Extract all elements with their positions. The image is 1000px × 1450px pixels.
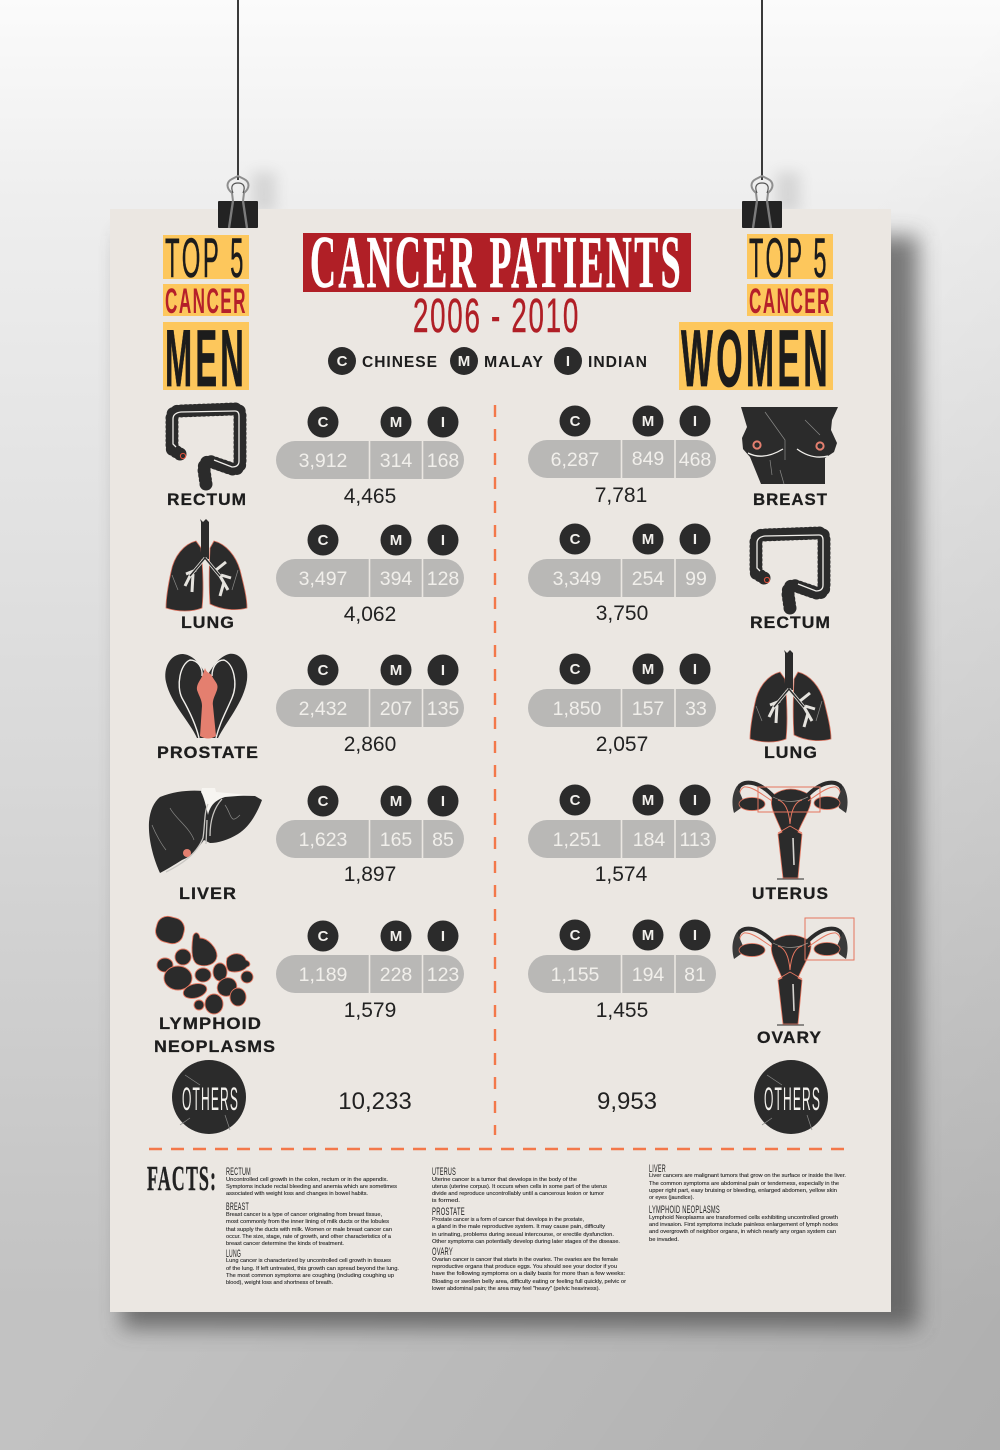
values pill (528, 689, 716, 727)
ethnicity badges: M (390, 532, 402, 549)
label: RECTUM (750, 613, 831, 632)
legend: INDIAN (588, 354, 648, 371)
heading: facts: FACTS: (147, 1159, 217, 1198)
values pill (528, 559, 716, 597)
text block: facts column 3: upper right part, easy bruising or bleeding, enlarged abdomen, yellow skin (649, 1188, 837, 1194)
text block: facts column 3: The common symptoms are abdominal pain or tenderness, especially in the (649, 1181, 839, 1187)
ethnicity badges: M (390, 662, 402, 679)
text block: facts column 2: is formed. (432, 1198, 460, 1204)
total: 7,781 (595, 484, 647, 507)
ethnicity badges: M (390, 414, 402, 431)
title (303, 222, 691, 304)
values pill (528, 955, 716, 993)
values pill: 99 (685, 568, 707, 590)
icon: ovary (732, 918, 854, 1025)
values pill: 1,850 (553, 698, 602, 720)
text block: facts column 1: RECTUM (226, 1166, 251, 1178)
panel: men rectum (167, 406, 464, 509)
label: LUNG (181, 613, 235, 632)
text block: facts column 3: Lymphoid Neoplasms are transformed cells exhibiting uncontrolled growth (649, 1215, 838, 1221)
text block: facts column 1: Breast cancer is a type of cancer originating from breast tissue, (226, 1212, 382, 1218)
ethnicity badges (308, 406, 458, 438)
panel: women lung (528, 650, 831, 762)
text: OTHERS (764, 1081, 821, 1117)
ethnicity badges: C (570, 792, 581, 809)
icon: lymph nodes (153, 914, 253, 1014)
ethnicity badges: I (693, 661, 697, 678)
label: OVARY (757, 1028, 822, 1047)
total: 3,750 (596, 602, 648, 625)
ethnicity badges: M (642, 792, 654, 809)
text block: facts column 2: Bloating or swollen belly area, difficulty eating or feeling full quickly, pelvic or (432, 1279, 626, 1285)
text block: facts column 1: occur. The size, stage, rate of growth, and other characteristics of a (226, 1234, 392, 1240)
heading: top 5 cancer men (163, 226, 249, 404)
ethnicity badges: I (441, 414, 445, 431)
values pill: 85 (432, 829, 454, 851)
ethnicity badges: M (642, 413, 654, 430)
text: TOP 5 (165, 226, 246, 289)
text block: facts column 2: a gland in the male reproductive system. It may cause pain, difficulty (432, 1224, 605, 1230)
panel: men others: OTHERS (182, 1081, 239, 1117)
ethnicity badges (560, 784, 710, 816)
text block: facts column 2: in urinating, problems during sexual intercourse, or erectile dysfunction. (432, 1232, 614, 1238)
total: 9,953 (597, 1088, 657, 1115)
ethnicity badges: C (570, 531, 581, 548)
ethnicity badges: C (318, 662, 329, 679)
icon: rectum (172, 409, 240, 484)
ethnicity badges (308, 786, 458, 816)
clip shadows (252, 172, 800, 212)
text block: facts column 2: Uterine cancer is a tumor that develops in the body of the (432, 1177, 577, 1183)
values pill: 394 (380, 568, 412, 590)
values pill (276, 689, 464, 727)
ethnicity badges: C (318, 793, 329, 810)
ethnicity badges (308, 920, 458, 952)
label (154, 1014, 276, 1056)
ethnicity badges: M (642, 927, 654, 944)
panel: men others (172, 1060, 412, 1134)
panel: men liver (149, 786, 464, 903)
icon: others circle (754, 1060, 828, 1134)
legend: MALAY (484, 354, 544, 371)
text: TOP 5 (749, 226, 829, 289)
values pill: 228 (380, 964, 412, 986)
values pill: 849 (632, 448, 664, 470)
text block: facts column 3: LIVER (649, 1163, 666, 1175)
ethnicity badges: I (441, 662, 445, 679)
total: 2,860 (344, 733, 396, 756)
text block: facts column 2: reproductive organs that produce eggs. You should see your doctor if you (432, 1264, 617, 1270)
total: 4,465 (344, 485, 396, 508)
values pill: 254 (632, 568, 664, 590)
icon: uterus (732, 783, 848, 879)
text block: facts column 3: and overgrowth of neighbor organs, in which nearly any organ system can (649, 1229, 836, 1235)
icon: lung (750, 650, 831, 742)
panel: women ovary (528, 918, 854, 1047)
values pill: 1,251 (553, 829, 601, 851)
poster panel (110, 209, 891, 1312)
legend (328, 347, 648, 375)
text block: facts column 2: have the following symptoms on a daily basis for more than a few weeks: (432, 1271, 625, 1277)
text block: facts column 1: of the lung. If left untreated, this growth can spread beyond the lung. (226, 1266, 399, 1272)
hanging wire left (237, 0, 239, 180)
ethnicity badges (560, 524, 710, 554)
values pill: 194 (632, 964, 664, 986)
label: UTERUS (752, 884, 829, 903)
values pill (528, 440, 716, 478)
text block: facts column 1: breast cancer determine the kinds of treatment. (226, 1241, 344, 1247)
ethnicity badges: C (318, 532, 329, 549)
panel: men lung (166, 519, 464, 632)
panel: women breast (528, 406, 838, 509)
panel: men prostate (157, 654, 464, 762)
panel: women uterus (528, 783, 848, 903)
text block: facts column 1: BREAST (226, 1201, 249, 1213)
values pill: 314 (380, 450, 412, 472)
text block: facts column 1: Lung cancer is characterized by uncontrolled cell growth in tissues (226, 1258, 391, 1264)
values pill: 3,349 (553, 568, 601, 590)
ethnicity badges: I (441, 793, 445, 810)
legend: CHINESE (362, 354, 438, 371)
values pill: 123 (427, 964, 459, 986)
ethnicity badges (308, 654, 458, 686)
total: 1,579 (344, 999, 396, 1022)
ethnicity badges: C (570, 413, 581, 430)
subtitle: years: 2006 - 2010 (413, 290, 580, 343)
total: 2,057 (596, 733, 648, 756)
horizontal divider (149, 1148, 846, 1150)
values pill: 128 (427, 568, 459, 590)
ethnicity badges (560, 406, 710, 436)
total: 1,574 (595, 863, 648, 886)
text block: facts column 2: divide and reproduce uncontrollably until a cancerous lesion or tumor (432, 1191, 604, 1197)
ethnicity badges: I (693, 531, 697, 548)
total: 1,897 (344, 863, 396, 886)
values pill (276, 559, 464, 597)
icon: prostate (165, 654, 247, 738)
text block: facts column 1: Uncontrolled cell growth in the colon, rectum or in the appendix. (226, 1177, 388, 1183)
text block: facts column 2: lower abdominal pain; the area may feel "heavy" (pelvic heaviness). (432, 1286, 600, 1292)
legend: I (566, 353, 570, 370)
heading: top 5 cancer women (679, 226, 833, 404)
hanging wire right (761, 0, 763, 180)
ethnicity badges: M (390, 928, 402, 945)
values pill: 168 (427, 450, 459, 472)
text block: facts column 3: and invasion. First symptoms include painless enlargement of lymph nodes (649, 1222, 838, 1228)
values pill: 165 (380, 829, 412, 851)
values pill (528, 820, 716, 858)
label: BREAST (753, 490, 828, 509)
values pill (276, 955, 464, 993)
values pill: 184 (633, 829, 665, 851)
values pill: 468 (679, 449, 711, 471)
text block: facts column 2: UTERUS (432, 1166, 456, 1178)
text block: facts column 3: LYMPHOID NEOPLASMS (649, 1204, 720, 1216)
panel: women rectum (528, 524, 831, 632)
values pill: 33 (685, 698, 707, 720)
ethnicity badges: M (642, 531, 654, 548)
text block: facts column 1: Symptoms include rectal bleeding and anemia which are sometimes (226, 1184, 397, 1190)
values pill: 81 (684, 964, 706, 986)
total: 10,233 (338, 1088, 412, 1115)
icon: lung (166, 519, 247, 611)
icon: rectum (756, 533, 824, 608)
values pill: 113 (679, 829, 711, 851)
text block: facts column 1: most commonly from the inner lining of milk ducts or the lobules (226, 1219, 389, 1225)
ethnicity badges (560, 654, 710, 684)
ethnicity badges: I (693, 413, 697, 430)
ethnicity badges (560, 920, 710, 950)
heading: top 5 cancer women: CANCER (749, 282, 831, 321)
ethnicity badges: M (390, 793, 402, 810)
values pill: 6,287 (551, 449, 599, 471)
panel: women others (597, 1060, 828, 1134)
ethnicity badges (308, 524, 458, 556)
text block: facts column 2 (432, 1166, 626, 1292)
text block: facts column 3: or eyes (jaundice). (649, 1195, 694, 1201)
label: LUNG (764, 743, 818, 762)
label: RECTUM (167, 490, 247, 509)
text block: facts column 1 (226, 1166, 399, 1286)
text block: facts column 3: Liver cancers are malignant tumors that grow on the surface or inside the liver. (649, 1173, 846, 1179)
heading: top 5 cancer men: CANCER (165, 282, 247, 321)
icon: others circle (172, 1060, 246, 1134)
text block: facts column 1: associated with weight loss and changes in bowel habits. (226, 1191, 368, 1197)
values pill (276, 441, 464, 479)
total: 4,062 (344, 603, 396, 626)
poster shadow (122, 236, 918, 1328)
ethnicity badges: C (318, 414, 329, 431)
ethnicity badges: I (441, 532, 445, 549)
text block: facts column 2: Ovarian cancer is cancer that starts in the ovaries. The ovaries are the female (432, 1257, 618, 1263)
values pill: 135 (427, 698, 459, 720)
values pill: 1,155 (551, 964, 600, 986)
icon: binder clip left (218, 176, 258, 228)
text: MEN (165, 314, 247, 404)
text block: facts column 1: LUNG (226, 1248, 241, 1260)
values pill: 1,189 (299, 964, 347, 986)
ethnicity badges: I (441, 928, 445, 945)
values pill: 3,912 (299, 450, 347, 472)
total: 1,455 (596, 999, 648, 1022)
ethnicity badges: C (318, 928, 329, 945)
legend: C (337, 353, 348, 370)
text block: facts column 1: The most common symptoms are coughing (including coughing up (226, 1273, 394, 1279)
text block: facts column 2: PROSTATE (432, 1206, 465, 1218)
ethnicity badges: C (570, 927, 581, 944)
label: NEOPLASMS (154, 1037, 276, 1056)
panel: men lymphoid neoplasms (153, 914, 464, 1056)
text block: facts column 2: OVARY (432, 1246, 453, 1258)
text block: facts column 1: blood), weight loss and shortness of breath. (226, 1280, 333, 1286)
text block: facts column 2: Other symptoms can potentially develop during later stages of the disease. (432, 1239, 620, 1245)
legend: M (458, 353, 470, 370)
text block: facts column 2: uterus (uterine corpus). It occurs when cells in some part of the uterus (432, 1184, 607, 1190)
values pill: 1,623 (299, 829, 347, 851)
label: LIVER (179, 884, 237, 903)
values pill: 207 (380, 698, 412, 720)
text block: facts column 1: that supply the ducts with milk. Women or male breast cancer can (226, 1227, 392, 1233)
ethnicity badges: M (642, 661, 654, 678)
values pill: 3,497 (299, 568, 347, 590)
ethnicity badges: I (693, 927, 697, 944)
text block: facts column 3: be invaded. (649, 1237, 679, 1243)
icon: liver (149, 788, 262, 873)
label: PROSTATE (157, 743, 259, 762)
values pill (276, 820, 464, 858)
text block: facts column 3 (649, 1163, 846, 1243)
icon: binder clip right (742, 176, 782, 228)
values pill: 157 (632, 698, 664, 720)
ethnicity badges: C (570, 661, 581, 678)
ethnicity badges: I (693, 792, 697, 809)
label: LYMPHOID (159, 1014, 262, 1033)
icon: breast (741, 407, 838, 484)
values pill: 2,432 (299, 698, 347, 720)
text block: facts column 2: Prostate cancer is a form of cancer that develops in the prostate, (432, 1217, 584, 1223)
vertical divider (494, 405, 496, 1135)
